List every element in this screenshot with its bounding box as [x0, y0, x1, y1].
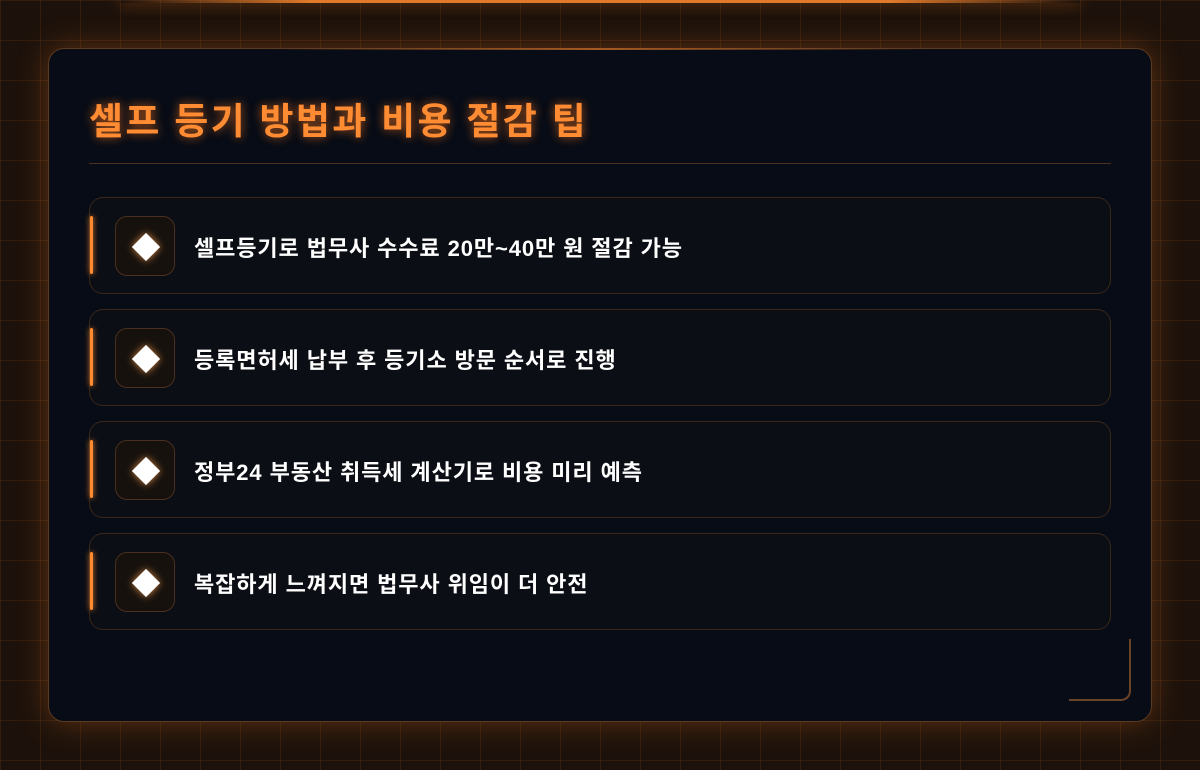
- item 4: [89, 533, 1111, 630]
- icon: diamond: [115, 216, 175, 276]
- item 3: [89, 421, 1111, 518]
- text 4: 복잡하게 느껴지면 법무사 위임이 더 안전: [194, 572, 588, 597]
- text 3: 정부24 부동산 취득세 계산기로 비용 미리 예측: [194, 460, 643, 485]
- text 1: 셀프등기로 법무사 수수료 20만~40만 원 절감 가능: [194, 236, 683, 261]
- icon: diamond: [115, 440, 175, 500]
- item 1: [89, 197, 1111, 294]
- icon: diamond: [115, 552, 175, 612]
- corner bracket: [1069, 639, 1131, 701]
- icon: diamond: [115, 328, 175, 388]
- title: 셀프 등기 방법과 비용 절감 팁: [89, 101, 588, 142]
- text 2: 등록면허세 납부 후 등기소 방문 순서로 진행: [194, 348, 617, 373]
- item 2: [89, 309, 1111, 406]
